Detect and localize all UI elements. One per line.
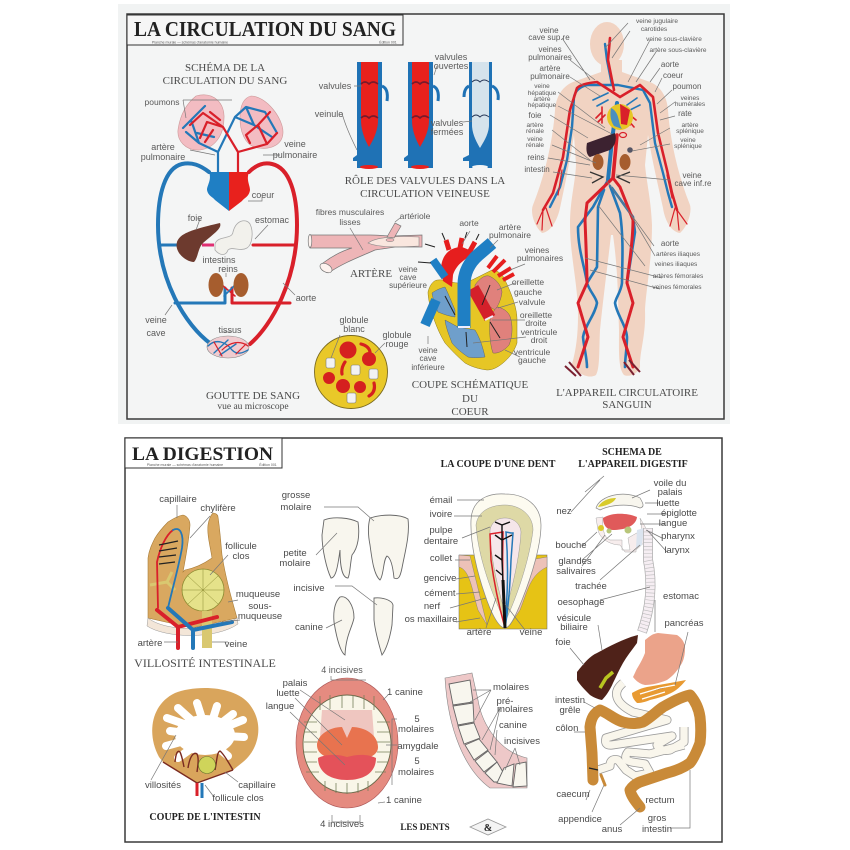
labels: 1 canine — [387, 687, 423, 698]
labels: aorte — [459, 218, 479, 228]
labels: luette — [656, 498, 680, 509]
labels: muqueuse — [238, 611, 282, 622]
labels: 1 canine — [386, 795, 422, 806]
labels: veine — [527, 136, 543, 143]
labels: humérales — [675, 101, 706, 108]
labels: pré- — [497, 696, 513, 707]
labels: tissus — [218, 325, 242, 335]
labels: vésicule — [557, 613, 591, 624]
labels: palais — [658, 487, 683, 498]
labels: canine — [499, 720, 527, 731]
labels: RÔLE DES VALVULES DANS LA — [345, 175, 505, 187]
title: la digestion: LA DIGESTION — [132, 444, 273, 465]
diagram: coupe schématique du coeur — [389, 218, 563, 418]
lungs — [178, 95, 283, 172]
labels: foie — [529, 111, 542, 120]
labels: cave inf.re — [675, 179, 712, 188]
labels: follicule — [225, 541, 257, 552]
labels: amygdale — [397, 741, 439, 752]
labels: pulmonaire — [273, 150, 317, 160]
arteries — [537, 38, 687, 367]
labels — [405, 459, 556, 638]
labels: gauche — [518, 355, 546, 365]
labels: artère — [151, 142, 175, 152]
title: la circulation du sang: Édition 001 — [379, 40, 397, 44]
labels: larynx — [664, 545, 690, 556]
teeth — [322, 515, 408, 655]
labels: pulmonaire — [489, 230, 531, 240]
labels: rénale — [526, 142, 544, 149]
labels: veines — [681, 95, 700, 102]
labels: pulmonaire — [141, 152, 185, 162]
labels: molaires — [493, 682, 529, 693]
diagram: l'appareil circulatoire sanguin — [524, 18, 712, 411]
labels: trachée — [575, 581, 607, 592]
labels: globule — [339, 315, 369, 325]
intestine section — [152, 688, 258, 798]
labels: veine — [539, 26, 559, 35]
heading: SCHEMA DE — [602, 447, 662, 458]
labels: dentaire — [424, 536, 458, 547]
labels: grêle — [559, 705, 581, 716]
labels: voile du — [654, 478, 686, 489]
labels: veine — [225, 639, 247, 650]
labels: rectum — [645, 795, 675, 806]
title: la circulation du sang: Planche murale — schémas d'anatomie humaine — [152, 40, 228, 44]
labels — [555, 476, 704, 835]
labels: côlon — [556, 723, 578, 734]
labels: os maxillaire — [405, 614, 457, 625]
labels: cément — [424, 588, 456, 599]
labels: gencive — [424, 573, 456, 584]
small intestine — [598, 683, 684, 776]
head section — [596, 494, 647, 552]
labels: rénale — [526, 128, 544, 135]
labels — [141, 97, 317, 338]
labels: cave — [146, 328, 166, 338]
labels: langue — [659, 518, 687, 529]
labels: fibres musculaires — [316, 207, 384, 217]
heading: schéma de la circulation: SCHÉMA DE LA — [185, 62, 265, 74]
diagram: la coupe d'une dent — [405, 459, 556, 638]
organs — [586, 104, 633, 183]
labels: molaire — [280, 502, 312, 513]
labels: veine — [145, 315, 167, 325]
labels: gros — [648, 813, 666, 824]
labels: appendice — [558, 814, 602, 825]
labels: clos — [233, 551, 250, 562]
mouth — [296, 678, 398, 808]
title: la digestion: Édition 001 — [259, 462, 277, 467]
labels: muqueuse — [236, 589, 280, 600]
diagram: schéma de l'appareil digestif — [555, 447, 704, 835]
labels: biliaire — [560, 622, 588, 633]
labels: rouge — [385, 339, 409, 349]
labels: molaires — [497, 704, 533, 715]
labels — [206, 315, 412, 412]
labels: bouche — [555, 540, 587, 551]
labels: poumon — [673, 82, 701, 91]
labels — [279, 490, 377, 633]
labels: artériole — [400, 211, 431, 221]
labels: artère — [527, 122, 544, 129]
labels — [315, 52, 505, 200]
veins — [550, 44, 672, 367]
labels: splénique — [674, 143, 702, 150]
labels: COEUR — [451, 406, 489, 418]
labels: DU — [462, 393, 478, 405]
labels: artère — [682, 122, 699, 129]
labels: molaires — [398, 767, 434, 778]
heart section — [418, 232, 517, 370]
labels: oreillette — [520, 310, 552, 320]
labels: inférieure — [411, 363, 445, 372]
labels: intestins — [202, 255, 236, 265]
heading: schéma de la circulation — [163, 62, 287, 87]
labels: langue — [266, 701, 294, 712]
labels: glandes — [558, 556, 592, 567]
labels: pulmonaires — [517, 253, 563, 263]
labels: pancréas — [664, 618, 704, 629]
labels: veines iliaques — [655, 261, 698, 268]
labels: artères fémorales — [653, 273, 704, 280]
labels: droit — [531, 335, 548, 345]
labels: veine — [520, 627, 542, 638]
labels: hépatique — [528, 102, 557, 109]
labels: oesophage — [557, 597, 605, 608]
labels: follicule clos — [212, 793, 264, 804]
labels: incisives — [504, 736, 540, 747]
labels: artères iliaques — [656, 251, 701, 258]
labels: salivaires — [556, 566, 596, 577]
labels: coeur — [252, 190, 274, 200]
labels — [389, 218, 563, 418]
tooth section — [459, 494, 547, 629]
panel: la circulation du sang — [118, 4, 730, 424]
labels: artère — [534, 96, 551, 103]
labels: cave sup.re — [528, 33, 570, 42]
liver and stomach — [577, 633, 686, 703]
labels: nerf — [424, 601, 441, 612]
diagram: teeth types — [279, 490, 408, 655]
diagram: coupe de l'intestin — [145, 688, 276, 823]
labels: veinule — [315, 109, 343, 119]
labels: fermées — [431, 127, 464, 137]
labels: sous- — [248, 601, 272, 612]
labels: caecum — [556, 789, 590, 800]
labels: splénique — [676, 128, 704, 135]
labels: pulmonaire — [530, 72, 570, 81]
labels: artère — [138, 638, 162, 649]
labels: artère — [467, 627, 491, 638]
labels: valvule — [519, 297, 545, 307]
labels: épiglotte — [661, 508, 697, 519]
labels: incisive — [293, 583, 325, 594]
vein tube 3 — [463, 62, 498, 169]
labels: intestin — [642, 824, 672, 835]
labels: aorte — [296, 293, 316, 303]
labels — [524, 18, 712, 411]
labels: veine — [284, 139, 306, 149]
labels: 4 incisives — [320, 819, 364, 830]
panel: la digestion — [118, 432, 730, 847]
labels: veine jugulaire — [636, 18, 678, 25]
liver, stomach, kidneys — [177, 221, 252, 297]
blood drop under microscope — [314, 336, 388, 408]
labels: veine — [418, 346, 438, 355]
labels: ventricule — [514, 347, 550, 357]
labels: GOUTTE DE SANG — [206, 390, 300, 402]
labels: grosse — [282, 490, 310, 501]
labels: vue au microscope — [217, 402, 289, 412]
labels: veine — [398, 265, 418, 274]
labels: intestin — [524, 165, 550, 174]
circulation loops — [158, 163, 297, 344]
labels: valvules — [431, 118, 464, 128]
labels: globule — [382, 330, 412, 340]
labels: nez — [556, 506, 572, 517]
labels: artère sous-clavière — [649, 47, 707, 54]
title: la digestion: Planche murale — schémas d'anatomie humaine — [147, 463, 223, 467]
heart — [207, 172, 250, 211]
labels: pulmonaires — [528, 53, 572, 62]
labels: gauche — [514, 287, 542, 297]
labels: ivoire — [430, 509, 452, 520]
labels: CIRCULATION VEINEUSE — [360, 188, 490, 200]
labels — [400, 682, 540, 832]
labels: 5 — [414, 714, 420, 725]
large intestine — [589, 695, 701, 807]
labels: canine — [295, 622, 323, 633]
labels: collet — [430, 553, 452, 564]
diagram: villosité intestinale — [134, 494, 282, 670]
labels: palais — [283, 678, 308, 689]
heading — [578, 447, 688, 470]
labels: anus — [602, 824, 623, 835]
labels: LES DENTS — [400, 822, 450, 832]
labels — [266, 665, 439, 830]
labels: LA COUPE D'UNE DENT — [441, 459, 556, 470]
labels: veines — [538, 45, 562, 54]
labels: hépatique — [528, 90, 557, 97]
feet — [565, 360, 640, 376]
labels: reins — [527, 153, 545, 162]
labels: artère — [499, 222, 521, 232]
artery illustration — [308, 223, 422, 275]
labels: veine — [680, 137, 696, 144]
labels: SANGUIN — [602, 399, 652, 411]
heading: L'APPAREIL DIGESTIF — [578, 459, 688, 470]
labels: veine — [682, 171, 702, 180]
labels — [316, 207, 431, 280]
vein tube 2 — [404, 62, 438, 169]
labels: aorte — [661, 239, 680, 248]
diagram: artère — [308, 207, 431, 280]
labels: reins — [218, 264, 238, 274]
labels: rate — [678, 109, 692, 118]
villus — [147, 513, 238, 648]
labels: supérieure — [389, 281, 427, 290]
oesophagus — [642, 528, 650, 632]
labels: ARTÈRE — [350, 268, 392, 280]
labels: émail — [430, 495, 452, 506]
labels: intestin — [555, 695, 585, 706]
labels: oreillette — [512, 277, 544, 287]
tissues capillaries — [207, 336, 249, 358]
labels: estomac — [255, 215, 290, 225]
labels: COUPE SCHÉMATIQUE — [412, 379, 528, 391]
diagram: goutte de sang — [206, 315, 412, 412]
heading: schéma de la circulation: CIRCULATION DU SANG — [163, 75, 287, 87]
labels: artère — [540, 64, 561, 73]
labels: VILLOSITÉ INTESTINALE — [134, 656, 276, 670]
title: la circulation du sang: LA CIRCULATION DU SANG — [134, 17, 396, 41]
labels: veines fémorales — [652, 284, 702, 291]
labels: COUPE DE L'INTESTIN — [149, 812, 261, 823]
labels: L'APPAREIL CIRCULATOIRE — [556, 387, 698, 399]
labels: valvules — [435, 52, 468, 62]
labels: villosités — [145, 780, 181, 791]
labels: ventricule — [521, 327, 557, 337]
labels: cave — [420, 354, 437, 363]
labels: 5 — [414, 756, 420, 767]
labels: molaires — [398, 724, 434, 735]
labels — [134, 494, 282, 670]
labels: poumons — [145, 97, 179, 107]
labels: pulpe — [429, 525, 453, 536]
labels: 4 incisives — [321, 665, 363, 675]
vein tube 1 — [353, 62, 387, 169]
labels: aorte — [661, 60, 680, 69]
labels: foie — [188, 213, 202, 223]
labels: droite — [525, 318, 547, 328]
labels: chylifère — [200, 503, 236, 514]
labels: veines — [525, 245, 549, 255]
logo diamond: & — [484, 823, 492, 834]
logo diamond — [470, 819, 506, 835]
labels: molaire — [279, 558, 311, 569]
labels: valvules — [319, 81, 352, 91]
title: la digestion — [125, 438, 282, 468]
labels: carotides — [641, 26, 668, 33]
labels: veine — [534, 83, 550, 90]
labels: foie — [555, 637, 571, 648]
labels: estomac — [663, 591, 699, 602]
labels: cave — [400, 273, 417, 282]
labels: capillaire — [238, 780, 276, 791]
labels: veine sous-clavière — [646, 36, 702, 43]
labels: pharynx — [661, 531, 695, 542]
labels — [145, 735, 276, 823]
diagram: bouche — [266, 665, 439, 830]
labels: coeur — [663, 71, 683, 80]
diagram: rôle des valvules — [315, 52, 505, 200]
labels: petite — [283, 548, 307, 559]
diagram: arcade dentaire — [400, 673, 540, 832]
diagram: schéma de la circulation du sang — [141, 62, 317, 358]
labels: lisses — [339, 217, 361, 227]
labels: blanc — [343, 324, 365, 334]
labels: luette — [276, 688, 300, 699]
labels: capillaire — [159, 494, 197, 505]
labels: ouvertes — [434, 61, 469, 71]
dental arch — [445, 673, 527, 788]
body silhouette — [532, 22, 691, 377]
